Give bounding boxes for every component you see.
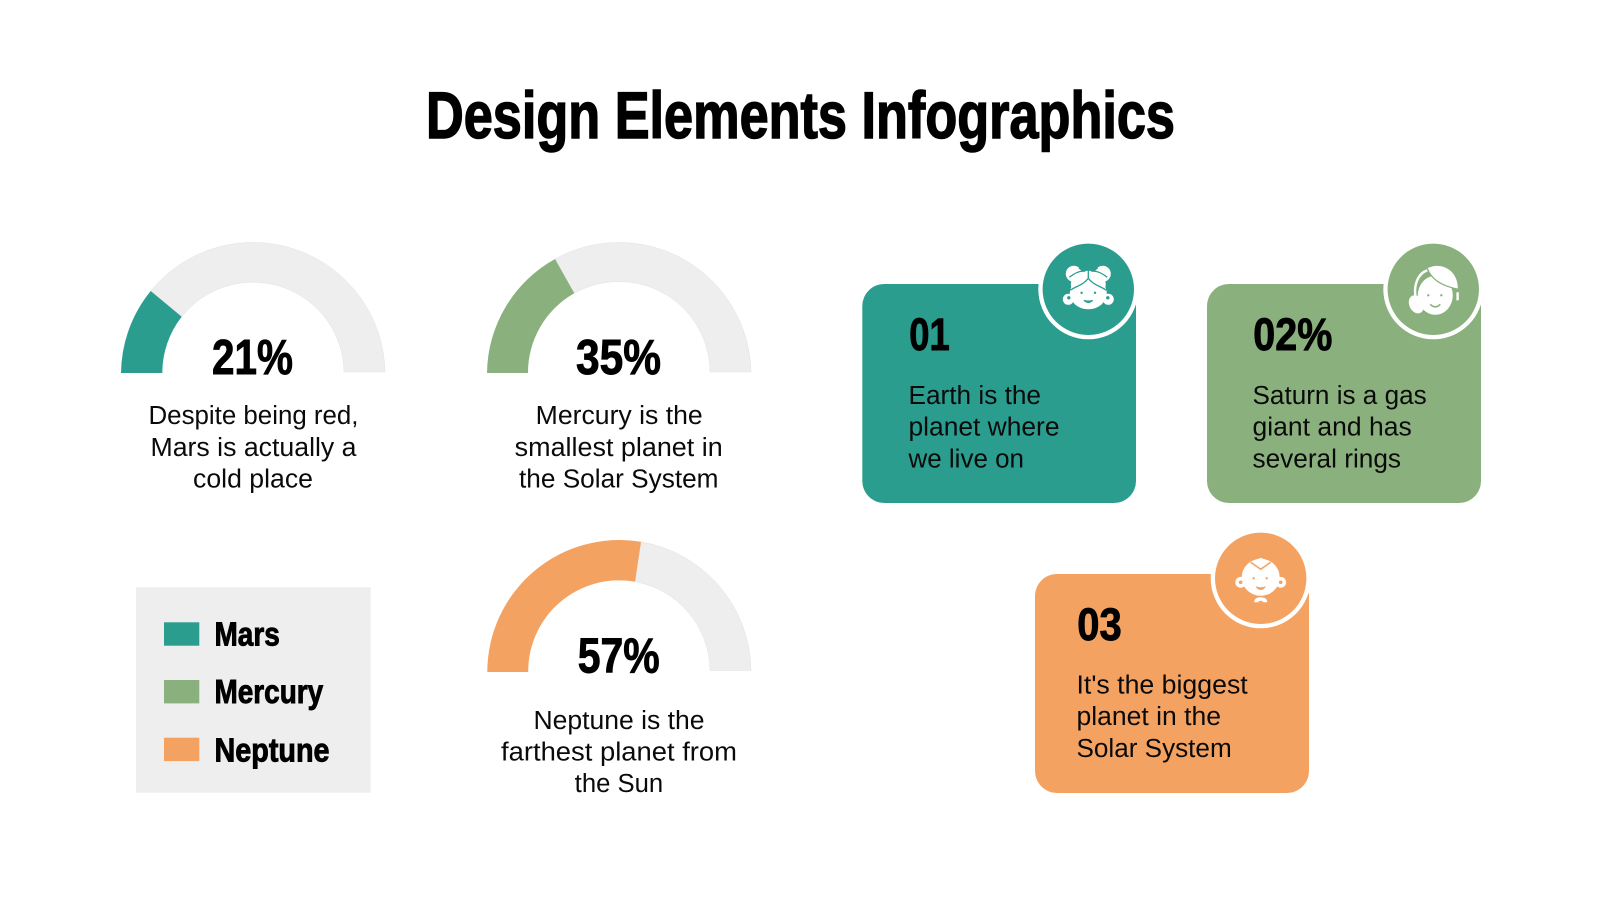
description: Saturn is a gas — [1252, 382, 1427, 410]
description: Mars is actually a — [150, 434, 357, 462]
gauge panel: Mercury 35% — [487, 242, 751, 493]
description: smallest planet in — [515, 434, 723, 462]
card 01: Earth — [862, 239, 1138, 503]
description: the Solar System — [519, 465, 718, 493]
description — [148, 402, 358, 493]
card background — [1035, 574, 1309, 793]
gauge value 57% — [487, 540, 641, 672]
description — [515, 402, 723, 493]
gauge panel: Neptune 57% — [487, 540, 751, 798]
description: planet where — [908, 414, 1060, 442]
icon: woman with headset — [1388, 244, 1479, 335]
description: Mercury is the — [536, 402, 703, 430]
description: Despite being red, — [148, 402, 358, 430]
card background — [1207, 284, 1481, 503]
card 02: Saturn — [1207, 239, 1483, 503]
percentage: 21% — [212, 331, 293, 385]
card 03: Jupiter — [1035, 528, 1311, 793]
percentage: 35% — [576, 331, 661, 385]
description — [907, 382, 1060, 473]
card background — [862, 284, 1136, 503]
gauge track — [151, 242, 385, 372]
number: 03 — [1077, 599, 1122, 650]
description: planet in the — [1076, 703, 1221, 731]
description: Solar System — [1076, 735, 1232, 763]
legend item: Mars — [164, 616, 280, 652]
gauge track — [555, 242, 751, 372]
description: the Sun — [575, 770, 663, 798]
legend item: Neptune: Neptune — [214, 732, 330, 768]
description: Neptune is the — [534, 707, 704, 735]
legend item: Neptune — [164, 732, 330, 768]
number: 02% — [1253, 309, 1332, 360]
description: It's the biggest — [1076, 671, 1248, 699]
number: 01 — [909, 309, 950, 360]
description: Earth is the — [908, 382, 1041, 410]
icon badge ring — [1211, 528, 1311, 628]
description: giant and has — [1252, 414, 1412, 442]
legend item: Mars: Mars — [214, 616, 280, 652]
gauge track — [635, 542, 751, 670]
percentage: 57% — [578, 630, 660, 684]
gauge value 35% — [487, 259, 574, 373]
gauge value 21% — [121, 291, 182, 373]
legend item: Mercury: Mercury — [214, 673, 324, 710]
description: farthest planet from — [501, 739, 737, 767]
gauge panel: Mars 21% — [121, 242, 385, 493]
icon: bearded man — [1215, 533, 1306, 624]
icon badge ring — [1038, 239, 1138, 339]
description: we live on — [907, 445, 1024, 473]
description — [1252, 382, 1427, 473]
legend panel — [136, 587, 371, 793]
title: Design Elements Infographics — [426, 78, 1175, 152]
legend item: Mercury — [164, 673, 324, 710]
description — [501, 707, 737, 798]
icon badge ring — [1383, 239, 1483, 339]
description: several rings — [1252, 445, 1401, 473]
description — [1076, 671, 1248, 763]
description: cold place — [193, 465, 313, 493]
icon: girl with hair buns — [1043, 244, 1134, 335]
